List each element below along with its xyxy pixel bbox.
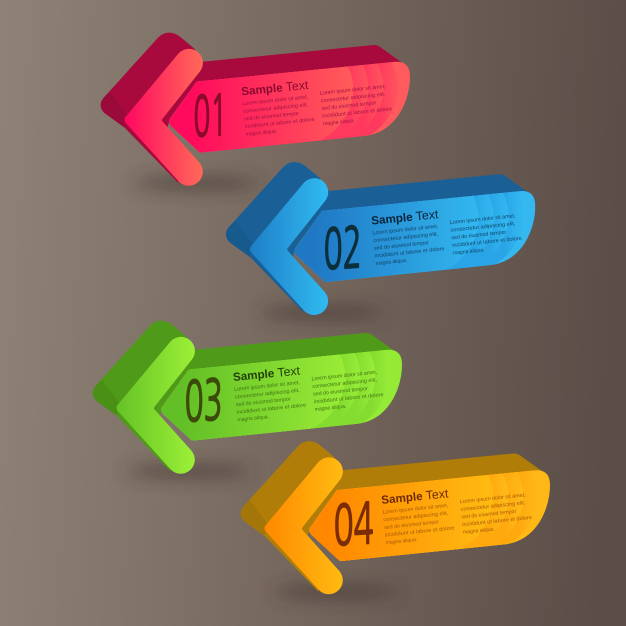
body text 03: [234, 369, 385, 423]
body text 02: magna aliqua.: [375, 258, 408, 267]
body text 04: consectetur adipiscing elit,: [383, 511, 448, 523]
body text 04: incididunt ut labore et dolore: [385, 525, 455, 539]
heading 02: Sample Text: [371, 207, 439, 228]
body text 03: incididunt ut labore et dolore: [236, 403, 307, 416]
arrow back side 01: [101, 33, 402, 183]
ground shadow 01: [133, 178, 260, 189]
body text 02: incididunt ut labore et dolore: [375, 246, 445, 259]
body text 03: sed do eiusmod tempor: [236, 396, 291, 408]
body text 02: consectetur adipiscing elit,: [373, 231, 438, 244]
body text 04: magna aliqua.: [385, 537, 418, 546]
number 03: 03: [185, 371, 223, 431]
arrow chevron 02: [250, 178, 328, 315]
arrow panel 03: [93, 321, 409, 477]
body text 01: incididunt ut labore et dolore: [322, 106, 392, 120]
arrow panel 01: [101, 33, 417, 189]
body text 04: [382, 492, 533, 546]
body text 01: magna aliqua.: [323, 118, 355, 127]
text panel face 01: [169, 62, 410, 153]
body text 03: consectetur adipiscing elit,: [312, 377, 377, 390]
arrow panel 04: [241, 441, 557, 597]
body text 01: Lorem ipsum dolor sit amet,: [320, 84, 386, 97]
body text 02: [372, 213, 523, 267]
body text 01: incididunt ut labore et dolore: [245, 117, 315, 130]
text panel face 04: [309, 470, 550, 562]
body text 01: sed do eiusmod tempor: [244, 111, 299, 123]
body text 02: Lorem ipsum dolor sit amet,: [372, 224, 439, 237]
body text 02: sed do eiusmod tempor: [451, 230, 507, 241]
body text 01: Lorem ipsum dolor sit amet,: [242, 94, 309, 107]
arrow chevron 03: [116, 337, 195, 474]
heading 01: Sample Text: [241, 78, 310, 98]
body text 04: consectetur adipiscing elit,: [460, 500, 526, 513]
ground shadow 03: [125, 466, 252, 477]
number 02: 02: [324, 219, 362, 278]
body text 02: consectetur adipiscing elit,: [450, 221, 516, 234]
body text 03: consectetur adipiscing elit,: [235, 388, 300, 401]
body text 02: sed do eiusmod tempor: [374, 240, 429, 252]
text panel face 03: [161, 350, 402, 441]
ground shadow 02: [259, 307, 385, 318]
heading 04: Sample Text: [381, 486, 450, 507]
body text 04: sed do eiusmod tempor: [384, 519, 439, 531]
body text 03: Lorem ipsum dolor sit amet,: [311, 370, 378, 382]
body text 03: incididunt ut labore et dolore: [314, 392, 384, 405]
body text 03: sed do eiusmod tempor: [313, 386, 368, 398]
body text 01: consectetur adipiscing elit,: [243, 102, 308, 115]
arrow back side 03: [93, 321, 394, 471]
body text 04: magna aliqua.: [463, 527, 495, 536]
arrow panel 02: [226, 162, 542, 318]
body text 02: incididunt ut labore et dolore: [452, 236, 522, 249]
body text 03: magna aliqua.: [314, 404, 347, 413]
number 04: 04: [334, 496, 374, 554]
body text 01: [242, 84, 393, 138]
body text 01: consectetur adipiscing elit,: [320, 92, 386, 104]
ground shadow 04: [273, 586, 400, 597]
arrow chevron 01: [124, 49, 203, 186]
number 01: 01: [193, 88, 227, 146]
arrow back side 02: [226, 162, 527, 313]
body text 02: Lorem ipsum dolor sit amet,: [450, 213, 516, 226]
body text 02: magna aliqua.: [453, 247, 485, 257]
body text 03: magna aliqua.: [237, 414, 269, 423]
body text 01: magna aliqua.: [245, 128, 278, 138]
text panel face 02: [294, 191, 536, 282]
body text 04: Lorem ipsum dolor sit amet,: [382, 503, 449, 516]
body text 04: sed do eiusmod tempor: [461, 509, 517, 521]
body text 01: sed do eiusmod tempor: [321, 100, 377, 112]
body text 04: incididunt ut labore et dolore: [462, 515, 532, 528]
arrow chevron 04: [264, 457, 343, 594]
body text 04: Lorem ipsum dolor sit amet,: [460, 492, 526, 505]
body text 03: Lorem ipsum dolor sit amet,: [234, 380, 300, 393]
arrow back side 04: [241, 441, 542, 592]
heading 03: Sample Text: [232, 364, 301, 384]
